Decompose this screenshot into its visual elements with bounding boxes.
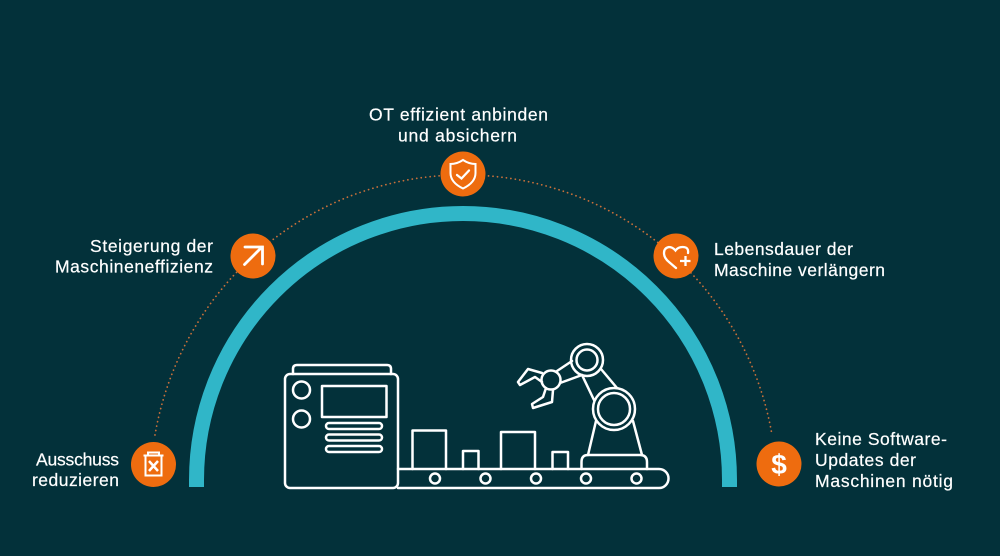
icon: shield with check — [440, 152, 486, 196]
dotted arc — [155, 175, 772, 435]
illustration: machine and conveyor with robot arm — [285, 344, 668, 488]
label: Ausschuss reduzieren — [32, 450, 119, 490]
label: OT effizient anbinden und absichern — [369, 104, 548, 146]
label: Steigerung der Maschineneffizienz — [55, 236, 213, 276]
label: OT effizient anbinden und absichern: OT effizient anbinden — [369, 104, 548, 124]
icon: arrow up right — [230, 234, 276, 278]
label: OT effizient anbinden und absichern: und absichern — [398, 126, 517, 146]
label: Steigerung der Maschineneffizienz: Maschineneffizienz — [55, 256, 213, 276]
icon: bin with cross — [131, 442, 176, 487]
label: Ausschuss reduzieren: reduzieren — [32, 470, 119, 490]
label: Keine Software-Updates der Maschinen nötig: Updates der — [815, 450, 916, 470]
robot arm — [518, 344, 647, 469]
label: Lebensdauer der Maschine verlängern — [714, 239, 885, 280]
icon: dollar sign — [756, 442, 802, 486]
boxes on conveyor — [412, 430, 568, 469]
icon: dollar sign: $ — [771, 449, 787, 480]
label: Lebensdauer der Maschine verlängern: Maschine verlängern — [714, 260, 885, 280]
conveyor belt — [398, 469, 668, 488]
label: Keine Software-Updates der Maschinen nötig — [815, 429, 953, 491]
icon: heart with plus — [654, 234, 698, 278]
label: Lebensdauer der Maschine verlängern: Lebensdauer der — [714, 239, 853, 259]
label: Keine Software-Updates der Maschinen nötig: Keine Software- — [815, 429, 947, 449]
teal dome arc — [196, 214, 730, 487]
label: Ausschuss reduzieren: Ausschuss — [36, 450, 119, 470]
label: Keine Software-Updates der Maschinen nötig: Maschinen nötig — [815, 471, 953, 491]
label: Steigerung der Maschineneffizienz: Steigerung der — [90, 236, 213, 256]
machine cabinet — [285, 365, 398, 488]
